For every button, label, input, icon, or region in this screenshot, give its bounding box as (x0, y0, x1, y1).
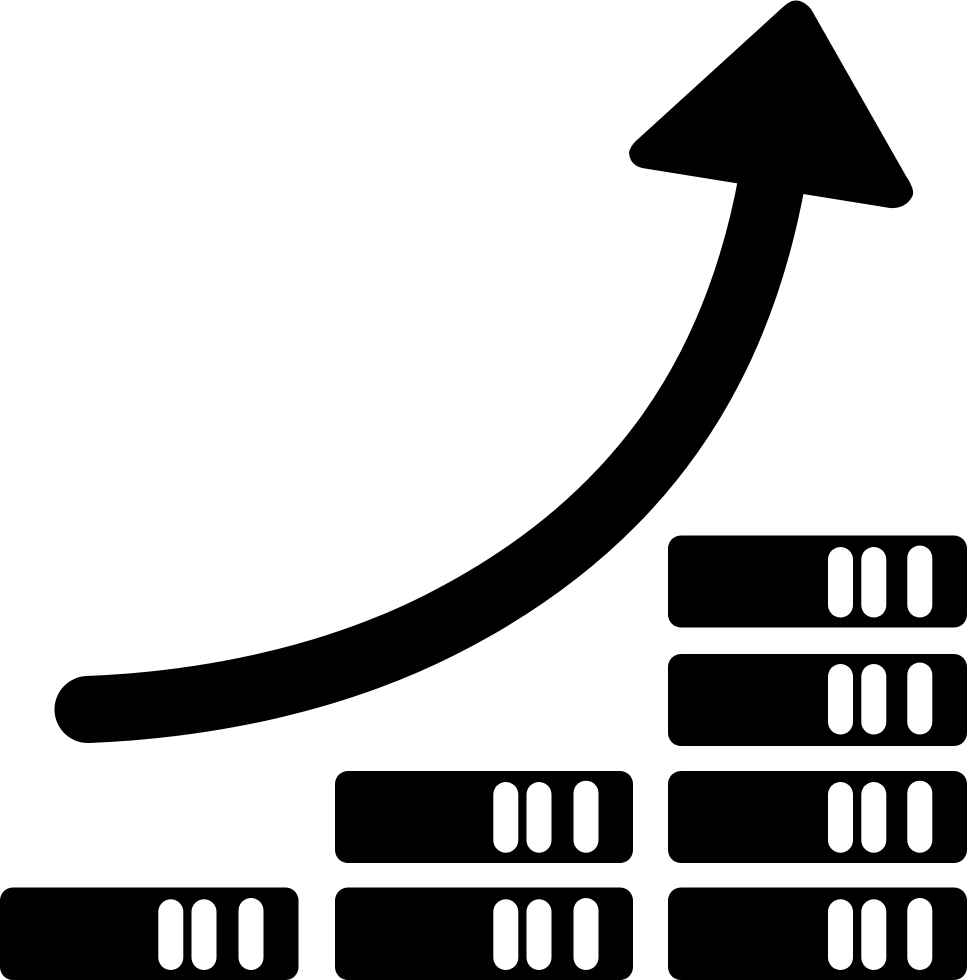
column 2 coins (335, 771, 633, 980)
icon: upward curved arrow (88, 0, 913, 709)
coin: column 3 level 2 (668, 771, 967, 863)
column 1 coins (0, 888, 298, 980)
coin: column 2 level 2 (335, 771, 633, 863)
column 3 coins (668, 536, 967, 980)
coin: column 3 level 3 (668, 654, 967, 746)
coin: column 3 level 4 (668, 536, 967, 628)
coin: column 1 level 1 (0, 888, 298, 980)
coin: column 3 level 1 (668, 888, 967, 980)
coin: column 2 level 1 (335, 888, 633, 980)
